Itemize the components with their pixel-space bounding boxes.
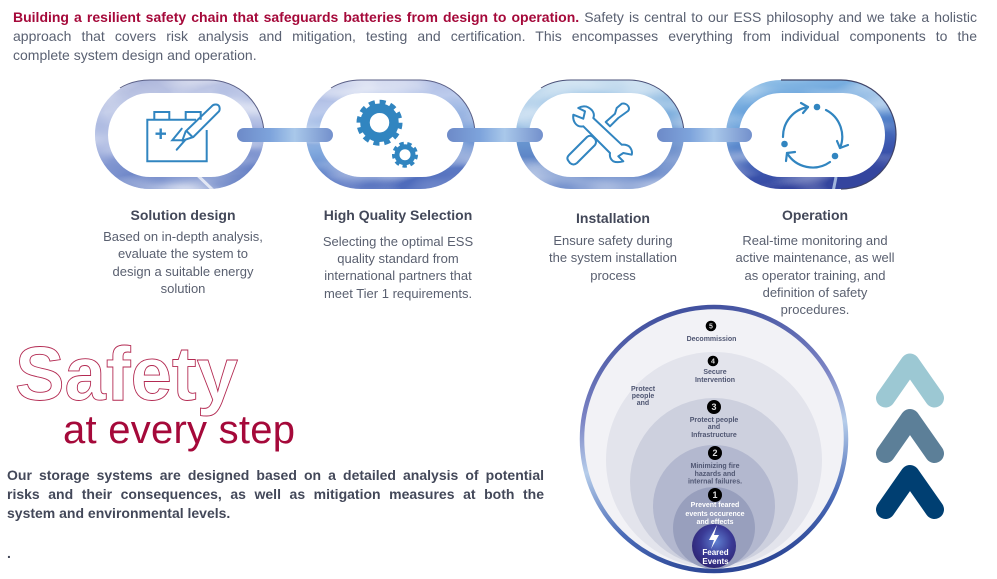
nested safety circles diagram xyxy=(582,307,846,571)
intro text block xyxy=(13,9,977,63)
intro text block: Building a resilient safety chain that safeguards batteries from design to operation. Safety is central to our ESS philosophy and we take a holistic xyxy=(13,9,977,25)
label: step 5 decommission: Decommission xyxy=(687,336,736,343)
circle level 3 xyxy=(630,398,798,566)
chain link: high quality selection xyxy=(306,80,476,190)
caption: solution design: evaluate the system to xyxy=(118,246,248,261)
label: step 1 prevent feared events: and effects xyxy=(697,519,734,526)
intro text block: approach that covers risk analysis and mitigation, testing and certification. This encompasses everything from individual components to the xyxy=(13,28,977,44)
body text block: risks and their consequences, as well as mitigation measures at both the xyxy=(7,486,544,502)
stray period: . xyxy=(7,545,11,561)
caption: high quality selection: quality standard from xyxy=(337,251,459,266)
icon: battery with pen xyxy=(147,104,220,161)
chain link: installation xyxy=(516,80,686,190)
label: step 4 secure intervention: Intervention xyxy=(695,377,735,384)
caption: installation: Installation xyxy=(576,210,650,226)
label: step 3 protect people and infrastructure: 3 xyxy=(711,402,717,412)
caption: installation xyxy=(549,210,677,283)
label: step 1 prevent feared events: Prevent feared xyxy=(691,502,739,509)
circle level 2 xyxy=(653,445,775,567)
label: step 4 secure intervention: 4 xyxy=(711,358,715,366)
outer ring xyxy=(582,307,846,571)
circle level 1 xyxy=(673,487,755,569)
label: stray protect people and xyxy=(631,386,656,407)
body text block xyxy=(7,467,544,521)
label: stray protect people and: people xyxy=(632,393,654,400)
intro text block: complete system design and operation. xyxy=(13,47,257,63)
label: step 2 minimizing fire hazards: 2 xyxy=(712,448,718,458)
circle: feared events core xyxy=(692,524,736,568)
caption: operation: procedures. xyxy=(781,302,849,317)
label: step 1 prevent feared events: 1 xyxy=(712,490,718,500)
label: step 2 minimizing fire hazards: internal failures. xyxy=(688,478,742,486)
label: step 3 protect people and infrastructure: and xyxy=(708,424,720,431)
label: step 5 decommission: 5 xyxy=(709,324,713,330)
caption: installation: Ensure safety during xyxy=(553,233,673,248)
caption: solution design: Based on in-depth analysis, xyxy=(103,229,263,244)
caption: operation: active maintenance, as well xyxy=(736,250,894,265)
label: step 2 minimizing fire hazards: hazards and xyxy=(695,471,735,478)
label: step 5 decommission xyxy=(687,321,736,343)
caption: installation: the system installation xyxy=(549,250,677,265)
label: step 3 protect people and infrastructure: Protect people xyxy=(690,417,738,424)
chain connector 3 xyxy=(657,128,752,142)
label: step 2 minimizing fire hazards: Minimizing fire xyxy=(690,463,740,470)
chain connector 1 xyxy=(237,128,333,142)
label: feared events: Feared xyxy=(702,548,729,557)
chain link: operation xyxy=(726,80,898,192)
caption: high quality selection xyxy=(323,207,473,301)
caption: solution design: design a suitable energy xyxy=(113,264,253,279)
caption: high quality selection: Selecting the optimal ESS xyxy=(323,234,473,249)
body text block: system and environmental levels. xyxy=(7,505,230,521)
label: feared events: Events xyxy=(702,557,729,566)
caption: solution design: solution xyxy=(161,281,205,296)
icon: gears xyxy=(359,102,416,166)
label: stray protect people and: Protect xyxy=(631,386,656,393)
body text block: Our storage systems are designed based on a detailed analysis of potential xyxy=(7,467,544,483)
caption: solution design: Solution design xyxy=(130,207,236,223)
caption: solution design xyxy=(103,207,263,296)
caption: installation: process xyxy=(590,268,636,283)
caption: operation: Operation xyxy=(782,207,848,223)
label: feared events xyxy=(702,548,729,566)
label: step 4 secure intervention: Secure xyxy=(703,369,727,376)
caption: operation: as operator training, and xyxy=(745,268,885,283)
caption: high quality selection: international partners that xyxy=(324,268,472,283)
chain link: solution design xyxy=(95,80,265,192)
label: step 3 protect people and infrastructure xyxy=(690,400,738,439)
circle level 4 xyxy=(606,352,822,568)
caption: operation xyxy=(736,207,894,317)
label: step 2 minimizing fire hazards xyxy=(688,446,742,486)
icon: crossed wrench and screwdriver xyxy=(567,103,632,164)
heading: at every step: at every step xyxy=(63,408,295,452)
heading: Safety outlined: Safety xyxy=(15,332,238,417)
caption: high quality selection: meet Tier 1 requirements. xyxy=(324,286,472,301)
chain connector 2 xyxy=(447,128,543,142)
label: step 3 protect people and infrastructure: Infrastructure xyxy=(691,432,737,439)
label: step 1 prevent feared events: events occurence xyxy=(685,511,745,518)
icon: upward chevrons xyxy=(886,363,934,510)
icon: cycle of three arrows xyxy=(781,103,848,168)
chevron mid xyxy=(886,418,934,454)
caption: operation: Real-time monitoring and xyxy=(742,233,888,248)
chevron light xyxy=(886,363,934,398)
chevron dark xyxy=(886,474,934,510)
icon: lightning bolt xyxy=(709,525,719,549)
label: step 4 secure intervention xyxy=(695,356,735,384)
caption: operation: definition of safety xyxy=(763,285,867,300)
label: step 1 prevent feared events xyxy=(685,488,745,526)
caption: high quality selection: High Quality Selection xyxy=(324,207,472,223)
label: stray protect people and: and xyxy=(637,400,649,407)
